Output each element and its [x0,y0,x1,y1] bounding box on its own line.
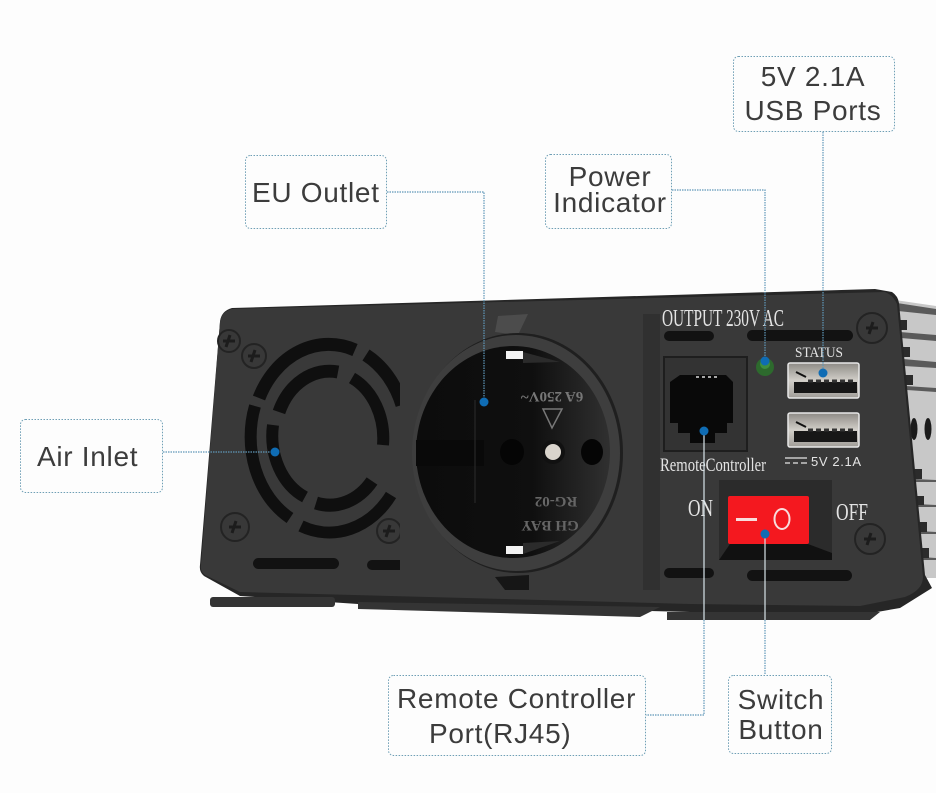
label: EU outlet [246,156,488,406]
USB ports [788,363,859,447]
vent slots [253,330,853,581]
panel printed text: OUTPUT 230V AC [662,306,784,332]
screws [218,313,887,554]
base plates [210,597,880,620]
label: power indicator: Indicator [553,187,667,218]
panel printed text: OFF [836,500,868,526]
power indicator LED [756,358,774,376]
panel printed text: RemoteController [660,455,767,476]
EU outlet: GH BAY [521,517,579,533]
panel printed text: STATUS [795,345,843,361]
label: switch button: Button [738,714,824,745]
label: remote controller port: Remote Controller [397,683,636,714]
RJ45 remote controller port [664,357,747,451]
fan grille [251,344,402,532]
label: remote controller port [388,426,708,756]
label: USB ports: USB Ports [744,95,882,126]
label: power indicator [546,154,770,366]
label: USB ports [734,56,894,378]
outlet markings: 6A 250V~ [521,388,583,404]
EU outlet: RG-02 [535,493,577,509]
rocker switch [719,480,832,560]
label: power indicator: Power [569,161,651,192]
label: air inlet: Air Inlet [37,441,138,472]
panel printed text [660,306,868,526]
panel printed text: 5V 2.1A [811,454,861,469]
panel printed text: ON [688,496,713,522]
label: switch button [728,530,832,754]
EU outlet [400,314,643,590]
label: air inlet [20,420,280,492]
label: USB ports: 5V 2.1A [761,61,865,92]
inverter side fins [895,300,936,578]
inverter front panel [200,289,932,620]
label: remote controller port: Port(RJ45) [429,718,571,749]
label: EU outlet: EU Outlet [252,177,380,208]
label: switch button: Switch [738,684,824,715]
